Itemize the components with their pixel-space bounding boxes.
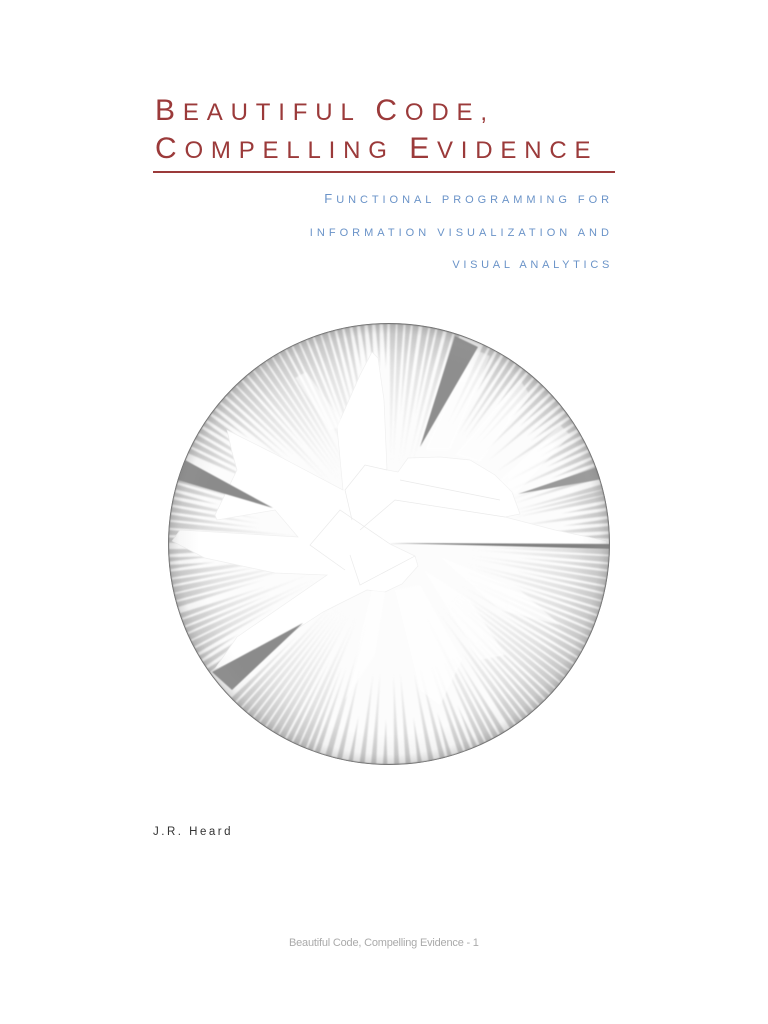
footer: Beautiful Code, Compelling Evidence - 1 xyxy=(289,937,479,949)
dark wedge: right xyxy=(518,467,602,494)
dark wedge: left xyxy=(178,460,273,508)
title rule xyxy=(153,171,615,173)
faint interior tree lines xyxy=(310,465,505,585)
title: BEAUTIFUL CODE, xyxy=(155,94,495,127)
subtitle: VISUAL ANALYTICS xyxy=(452,259,613,271)
title: COMPELLING EVIDENCE xyxy=(155,132,598,165)
radial tree visualization xyxy=(168,323,610,765)
subtitle xyxy=(310,191,613,271)
title xyxy=(155,94,598,165)
author: J.R. Heard xyxy=(153,826,233,838)
dark wedge: lower left xyxy=(212,623,303,690)
white sectors in lower half xyxy=(346,587,558,700)
rim outline xyxy=(168,324,610,764)
subtitle: FUNCTIONAL PROGRAMMING FOR xyxy=(324,191,613,206)
subtitle: INFORMATION VISUALIZATION AND xyxy=(310,227,613,239)
rim shading xyxy=(168,323,610,765)
dark line: horizontal spoke xyxy=(390,543,610,549)
white central blob and arms xyxy=(172,352,607,670)
radiating branch wedges xyxy=(168,323,610,765)
white sectors in upper half xyxy=(296,352,568,472)
dark wedge: top right xyxy=(420,336,478,447)
disc base xyxy=(168,323,610,765)
